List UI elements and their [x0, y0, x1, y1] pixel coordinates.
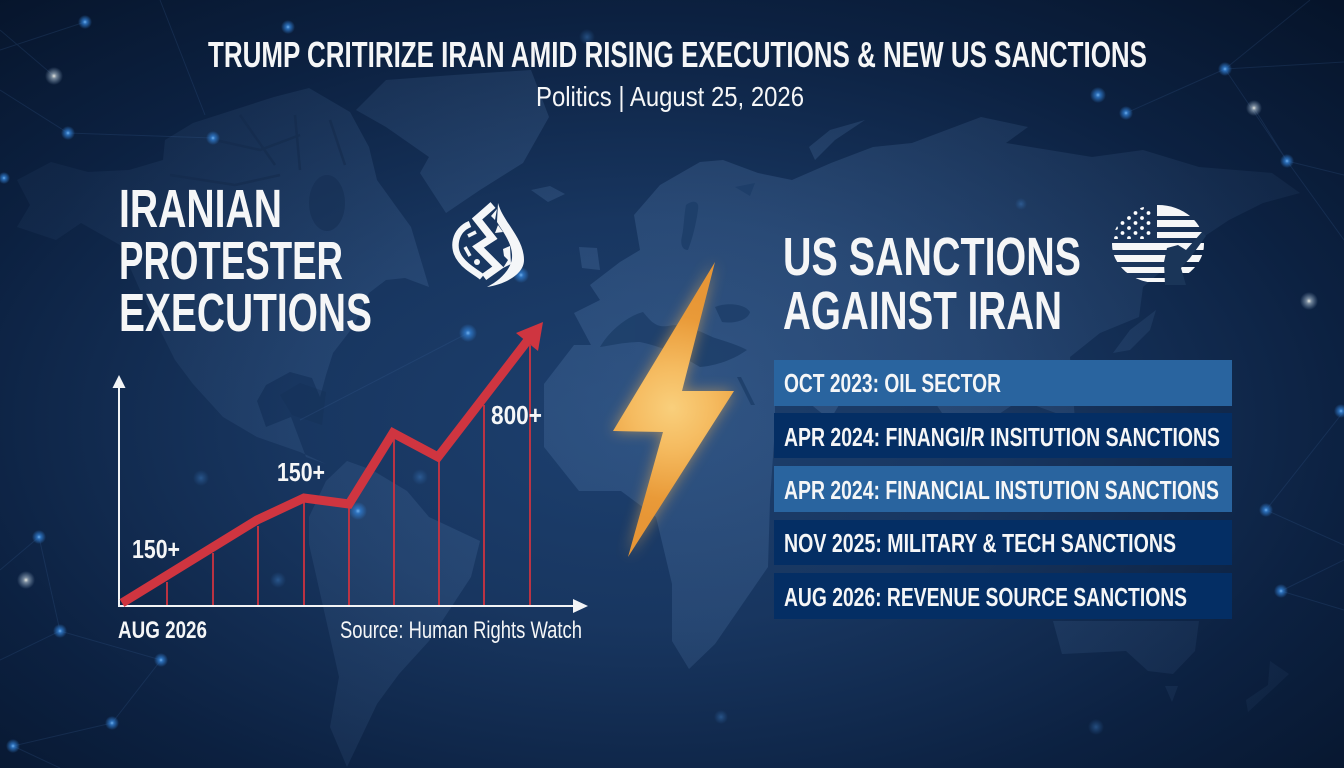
chart value labels: 150+	[277, 457, 325, 487]
sanction row: financial institution two	[774, 466, 1232, 512]
heading: Iranian protester executions: PROTESTER	[119, 231, 343, 291]
sanction row: military and tech	[774, 520, 1232, 565]
heading: Iranian protester executions: IRANIAN	[119, 179, 282, 239]
chart date label: AUG 2026	[118, 617, 207, 644]
chart axes	[112, 375, 588, 613]
chart: execution trend	[112, 322, 588, 644]
heading: US sanctions against Iran	[783, 227, 1081, 341]
subtitle: Politics | August 25, 2026	[536, 81, 804, 112]
sanction row: oil sector	[774, 360, 1232, 406]
icon: US flag map	[1110, 205, 1210, 285]
chart source: Source: Human Rights Watch	[340, 617, 582, 644]
sanction row: military and tech: NOV 2025: MILITARY & TECH SANCTIONS	[784, 528, 1176, 558]
icon: lightning bolt	[613, 262, 734, 557]
sanction row: revenue source	[774, 573, 1232, 619]
chart drop lines	[167, 345, 530, 606]
icon: Iranian emblem	[455, 203, 524, 287]
sanction row: revenue source: AUG 2026: REVENUE SOURCE SANCTIONS	[784, 582, 1187, 612]
sanction row: financial institution one	[774, 413, 1232, 458]
chart value labels: 150+	[132, 534, 180, 564]
sanction row: oil sector: OCT 2023: OIL SECTOR	[784, 368, 1001, 398]
heading: US sanctions against Iran: US SANCTIONS	[783, 227, 1081, 287]
chart value labels	[132, 400, 542, 564]
chart trend arrow	[122, 322, 543, 603]
heading: Iranian protester executions	[119, 179, 372, 343]
sanctions timeline list	[774, 360, 1232, 619]
heading: Iranian protester executions: EXECUTIONS	[119, 283, 372, 343]
heading: US sanctions against Iran: AGAINST IRAN	[783, 281, 1062, 341]
chart value labels: 800+	[491, 400, 542, 430]
